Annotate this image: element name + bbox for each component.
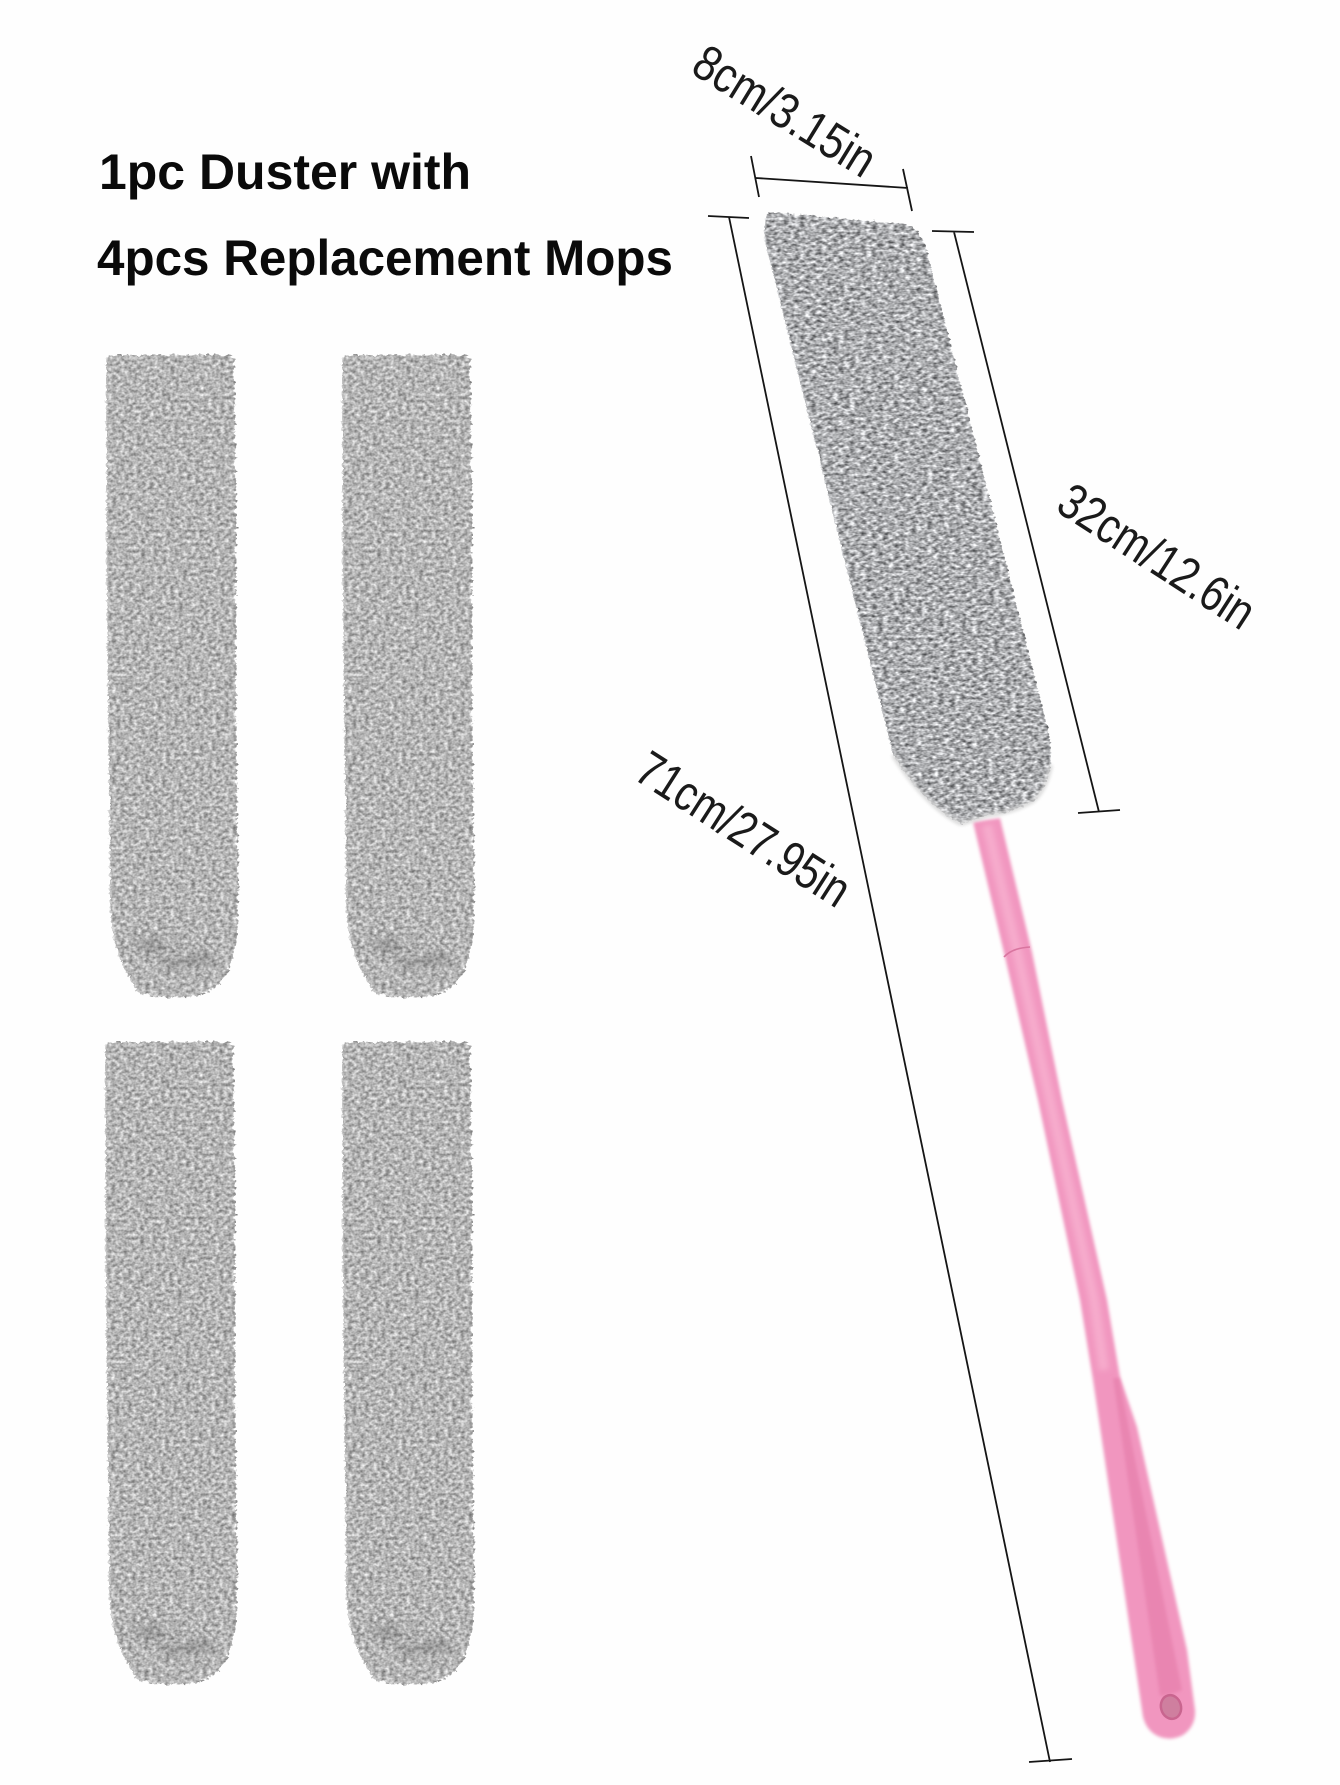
title line 2: 4pcs Replacement Mops	[97, 230, 673, 286]
replacement mop: bottom left	[105, 1042, 237, 1685]
dimension: head width 8cm: 8cm/3.15in	[683, 34, 886, 188]
duster head	[764, 212, 1051, 824]
handle joint	[1004, 947, 1030, 957]
dimension: head length 32cm	[932, 231, 1266, 813]
replacement mop: top right	[342, 355, 474, 998]
title line 1: 1pc Duster with	[99, 144, 471, 200]
title	[97, 144, 673, 286]
duster handle	[973, 818, 1195, 1739]
dimension: head length 32cm: 32cm/12.6in	[1048, 472, 1266, 640]
shaft highlight	[987, 825, 1104, 1370]
hanging hole	[1158, 1693, 1184, 1721]
replacement mop: bottom right	[342, 1042, 474, 1685]
dimension: total length 71cm	[626, 216, 1072, 1762]
dimension: total length 71cm: 71cm/27.95in	[626, 740, 861, 918]
replacement mop: top left	[106, 355, 238, 998]
hook groove	[1113, 1378, 1182, 1696]
